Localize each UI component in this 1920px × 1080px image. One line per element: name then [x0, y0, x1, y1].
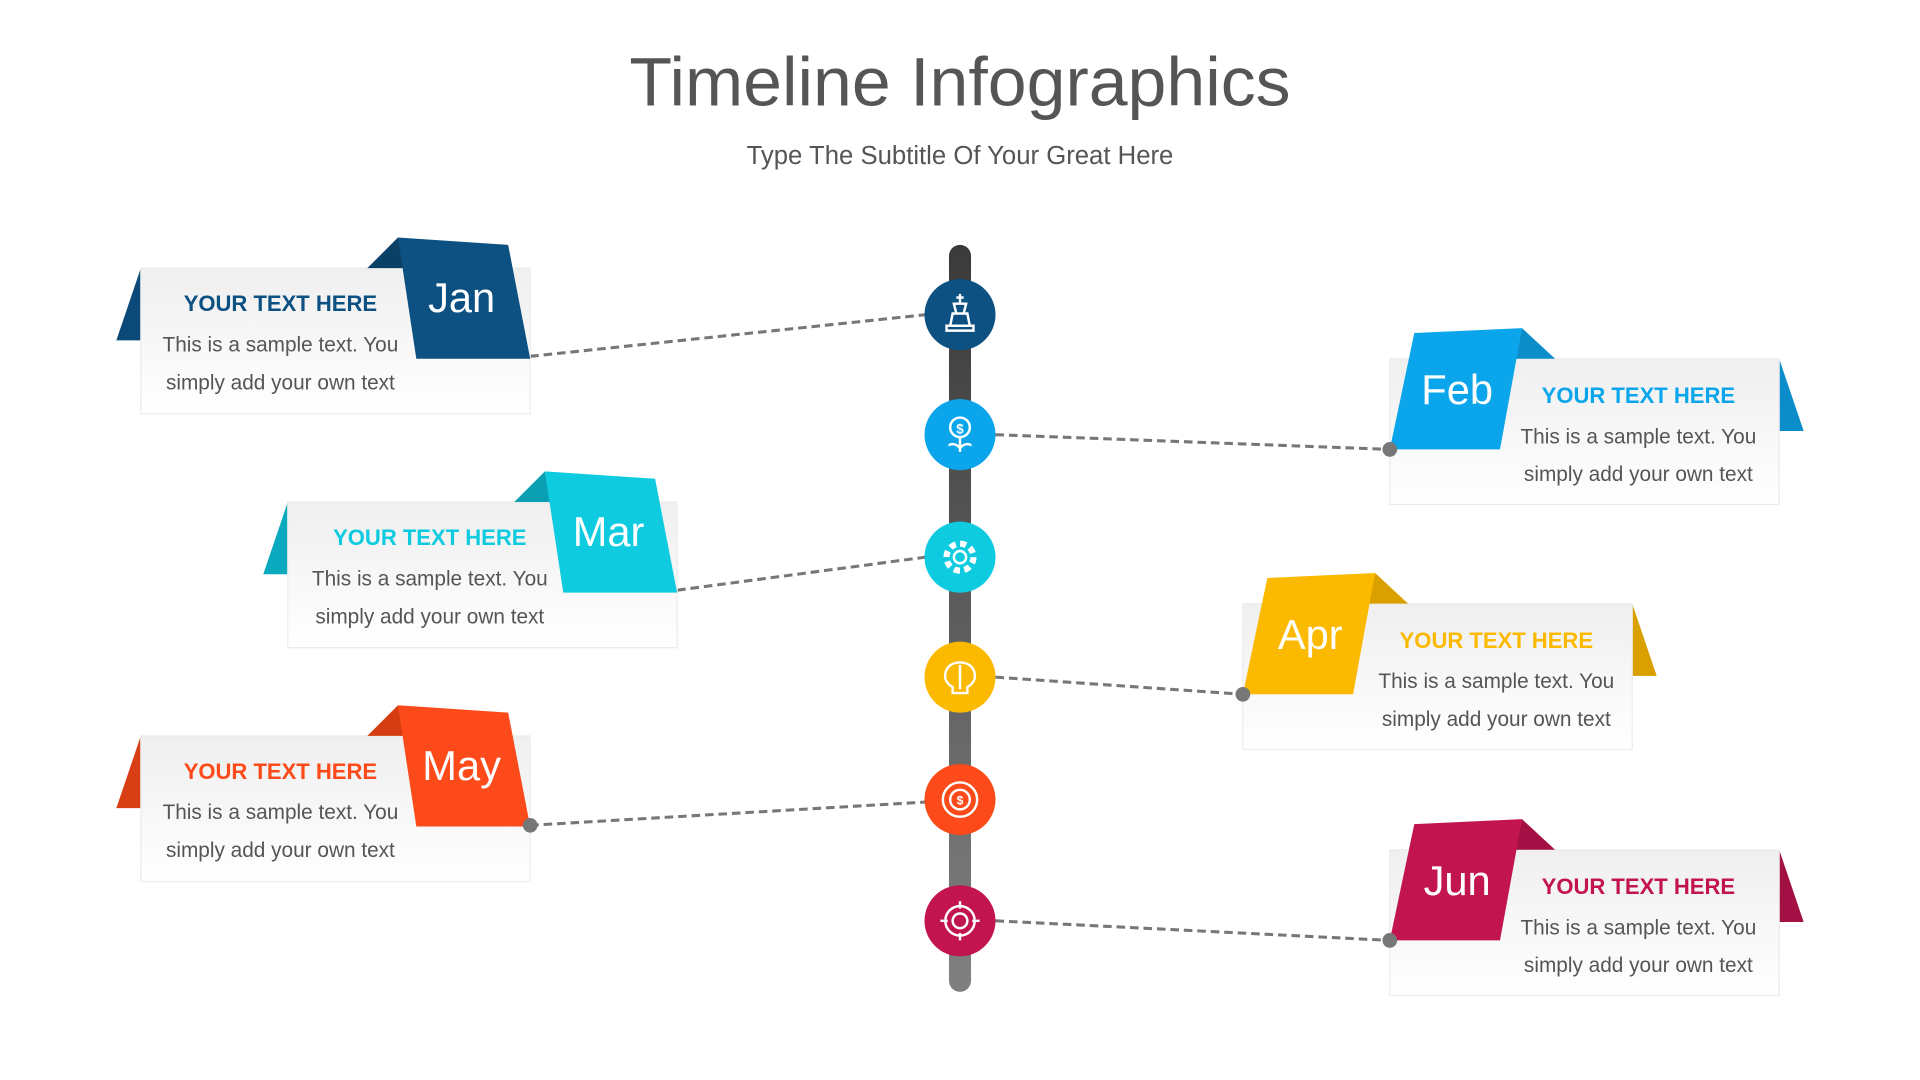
card: Feb: Feb: [1421, 366, 1493, 413]
card: Jun: [1390, 819, 1804, 996]
card: Jan: YOUR TEXT HERE: [184, 291, 377, 316]
card: Jun: YOUR TEXT HERE: [1542, 874, 1735, 899]
card: Apr: YOUR TEXT HERE: [1400, 628, 1593, 653]
card: Jun: This is a sample text. You: [1520, 916, 1756, 939]
connector lines: [530, 315, 1390, 940]
card: May: YOUR TEXT HERE: [184, 759, 377, 784]
card: Jan: [116, 238, 530, 414]
title: Timeline Infographics: [629, 43, 1291, 120]
icon: chess king: [924, 279, 996, 350]
card: Jan: Jan: [428, 274, 495, 321]
card: Jan: This is a sample text. You: [162, 333, 398, 356]
card: Mar: [263, 471, 677, 648]
icon: target: [924, 885, 996, 956]
subtitle: Type The Subtitle Of Your Great Here: [747, 142, 1173, 170]
card: Feb: This is a sample text. You: [1520, 425, 1756, 448]
icon: money cycle: [924, 764, 996, 835]
card: Apr: [1243, 573, 1657, 749]
connector dots: [523, 442, 1397, 948]
card: Jan: simply add your own text: [166, 371, 395, 394]
icon: brain: [924, 642, 996, 713]
card: Mar: Mar: [573, 508, 645, 555]
card: Mar: This is a sample text. You: [312, 567, 548, 590]
icon: money plant: [924, 399, 996, 470]
timeline bar: [949, 245, 971, 992]
card: Apr: Apr: [1278, 611, 1343, 658]
card: Apr: This is a sample text. You: [1378, 670, 1614, 693]
icon: money cycle: $: [957, 793, 964, 807]
card: Mar: YOUR TEXT HERE: [333, 525, 527, 550]
card: Feb: simply add your own text: [1524, 463, 1753, 486]
card: Jun: simply add your own text: [1524, 954, 1753, 977]
icon: gear: [924, 522, 996, 593]
card: Apr: simply add your own text: [1382, 708, 1611, 731]
card: May: simply add your own text: [166, 839, 395, 862]
card: Feb: [1390, 328, 1804, 504]
card: May: This is a sample text. You: [162, 801, 398, 824]
card: May: [116, 705, 530, 882]
card: Jun: Jun: [1424, 857, 1491, 904]
icon: money plant: $: [956, 421, 964, 436]
card: May: May: [422, 742, 501, 789]
card: Mar: simply add your own text: [315, 605, 544, 628]
card: Feb: YOUR TEXT HERE: [1542, 383, 1735, 408]
